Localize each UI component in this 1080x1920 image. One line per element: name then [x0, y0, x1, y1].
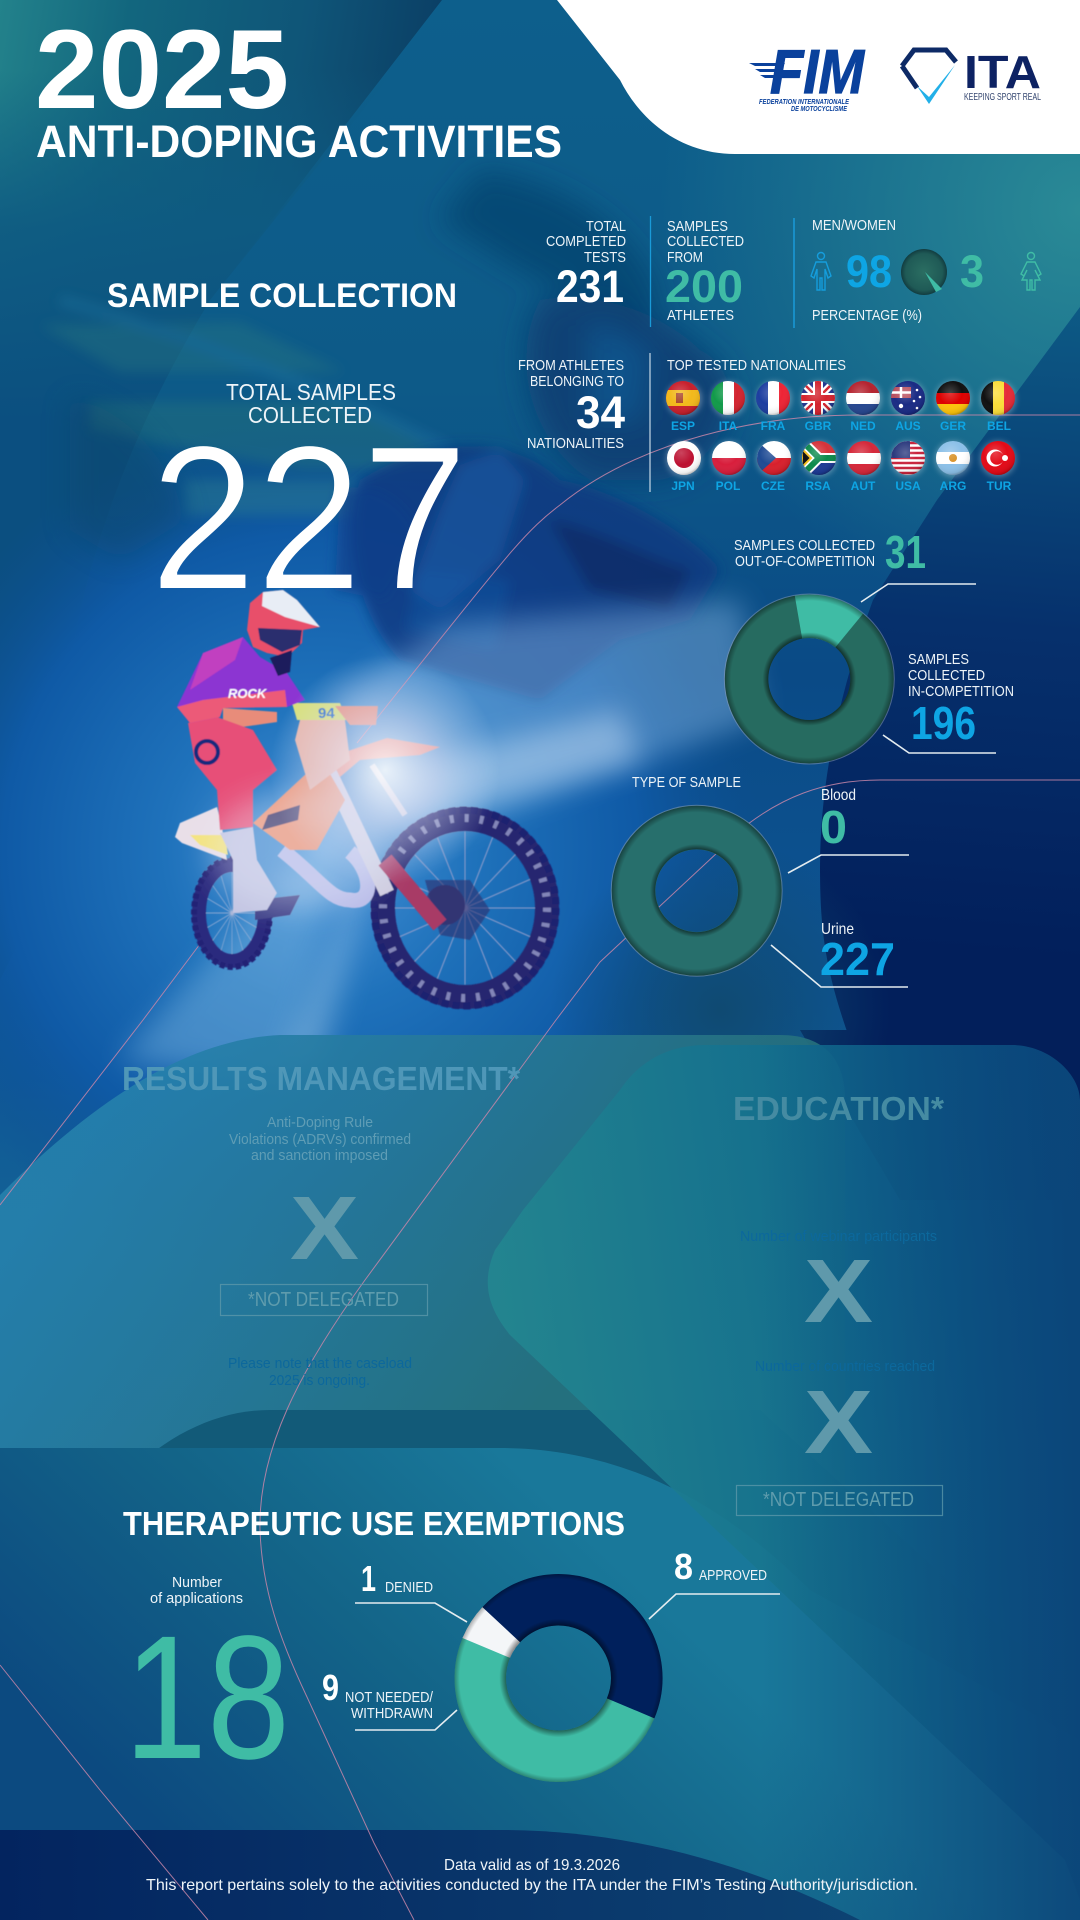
section: results management: X [290, 1179, 359, 1279]
stat: total completed tests: COMPLETED [546, 233, 626, 250]
label: denied: DENIED [385, 1579, 433, 1596]
label: denied [355, 1558, 467, 1622]
stat: samples collected from athletes: ATHLETES [667, 307, 734, 324]
flag USA [891, 441, 925, 475]
section: education: Number of webinar participants [740, 1228, 937, 1245]
flag labels: ARG [940, 479, 966, 493]
stat: number of applications: 18 [124, 1600, 290, 1796]
stat: nationalities [518, 357, 625, 452]
icon: man [811, 252, 831, 290]
stat: samples collected from athletes: FROM [667, 249, 703, 266]
label: not needed / withdrawn: NOT NEEDED/ [345, 1689, 434, 1706]
label: urine [771, 921, 908, 987]
rider boot [220, 827, 277, 913]
flag TUR [981, 441, 1015, 475]
heading: therapeutic use exemptions: THERAPEUTIC USE EXEMPTIONS [123, 1505, 625, 1542]
flag labels: RSA [805, 479, 831, 493]
section: results management: 2025 is ongoing. [269, 1372, 370, 1389]
flag FRA [756, 381, 790, 415]
stat: men / women percentage: 3 [960, 246, 984, 297]
flag NED [846, 381, 880, 415]
stat: samples collected from athletes: 200 [665, 261, 743, 312]
flag labels: TUR [987, 479, 1012, 493]
label: in-competition: IN-COMPETITION [908, 683, 1014, 700]
flag RSA [802, 441, 836, 475]
footer note: This report pertains solely to the activities conducted by the ITA under the FIM’s Testing Authority/jurisdiction. [146, 1877, 918, 1894]
header white panel [557, 0, 1080, 154]
divider [793, 218, 795, 328]
divider [649, 353, 651, 492]
stat: total completed tests: TOTAL [586, 218, 626, 235]
flag labels: ITA [719, 419, 738, 433]
stat: nationalities: BELONGING TO [530, 373, 624, 390]
section: education: *NOT DELEGATED [763, 1489, 914, 1511]
label: urine: 227 [820, 933, 895, 985]
logo: FIM: DE MOTOCYCLISME [791, 104, 848, 113]
stat: total completed tests [546, 218, 626, 312]
flag AUS [891, 381, 925, 415]
label: in-competition: 196 [911, 697, 976, 749]
section: education: X [804, 1373, 873, 1473]
flag GER [936, 381, 970, 415]
section: results management [122, 1060, 520, 1389]
footer note [146, 1857, 918, 1894]
heading: type of sample: TYPE OF SAMPLE [632, 774, 741, 791]
flag BEL [981, 381, 1015, 415]
flag labels: GER [940, 419, 966, 433]
section: education [733, 1090, 944, 1516]
flag POL [712, 441, 746, 475]
label: denied: 1 [361, 1558, 376, 1599]
frame and fork [175, 703, 440, 925]
stat: total samples collected: 227 [150, 403, 468, 633]
stat: number of applications: of applications [150, 1590, 243, 1607]
label: approved: 8 [674, 1546, 693, 1587]
flag ITA [711, 381, 745, 415]
stat: total completed tests: 231 [556, 261, 624, 312]
stat: total samples collected: COLLECTED [248, 402, 372, 428]
section: results management: Violations (ADRVs) confirmed [229, 1131, 411, 1148]
title: 2025 [35, 7, 289, 132]
pink decorative lines [0, 415, 1080, 1920]
flag GBR [801, 381, 835, 415]
rider logo on leg [196, 741, 218, 763]
footer band [0, 1830, 860, 1920]
exhaust [282, 850, 368, 900]
flag labels: AUT [851, 479, 876, 493]
label: in-competition: SAMPLES [908, 651, 969, 668]
title: ANTI-DOPING ACTIVITIES [36, 116, 562, 167]
label: approved: APPROVED [699, 1567, 767, 1584]
heading: sample collection: SAMPLE COLLECTION [107, 277, 457, 315]
rear wheel [194, 859, 270, 967]
flag JPN [667, 441, 701, 475]
flag labels: POL [716, 479, 740, 493]
flag labels: FRA [761, 419, 786, 433]
logo: ITA: ITA [964, 46, 1041, 98]
panel: results management background [0, 1035, 845, 1500]
stat: samples collected from athletes: COLLECTED [667, 233, 744, 250]
label: in-competition [883, 651, 1014, 753]
flag CZE [757, 441, 791, 475]
section: results management: *NOT DELEGATED [248, 1289, 399, 1311]
panel: therapeutic use exemptions background [0, 1410, 1080, 1920]
stat: total completed tests: TESTS [584, 249, 626, 266]
rider torso: ROCK [228, 686, 268, 701]
logo: ITA [902, 46, 1041, 104]
flag labels: NED [850, 419, 876, 433]
logo: FIM: FIM [770, 38, 865, 107]
stat: men / women percentage: MEN/WOMEN [812, 217, 896, 234]
flag halos [666, 381, 1016, 477]
flag ESP [666, 381, 700, 415]
rider legs [188, 717, 277, 830]
stat: samples collected from athletes: SAMPLES [667, 218, 728, 235]
right edge shading [760, 1045, 1080, 1920]
label: out-of-competition: OUT-OF-COMPETITION [735, 553, 875, 570]
education top-right corner [1012, 1045, 1080, 1100]
stat: samples collected from athletes [665, 218, 744, 324]
stat: men / women percentage [811, 217, 1041, 324]
label: blood: 0 [820, 801, 847, 853]
flag labels: GBR [805, 419, 832, 433]
pie: men/women [901, 249, 947, 295]
rider torso [177, 637, 305, 723]
section: results management: RESULTS MANAGEMENT* [122, 1060, 520, 1097]
logo: FIM: FEDERATION INTERNATIONALE [759, 97, 850, 106]
logo: ITA: KEEPING SPORT REAL [964, 92, 1041, 103]
donut chart: type of sample [611, 805, 782, 976]
label: not needed / withdrawn: WITHDRAWN [351, 1705, 433, 1722]
label: urine: Urine [821, 921, 854, 938]
flag grid [666, 381, 1016, 493]
label: in-competition: COLLECTED [908, 667, 985, 684]
label: out-of-competition: SAMPLES COLLECTED [734, 537, 875, 554]
section: results management: and sanction imposed [251, 1147, 388, 1164]
rider on motorbike [175, 590, 556, 1006]
section: education: EDUCATION* [733, 1090, 944, 1127]
section: results management: Please note that the caseload [228, 1355, 412, 1372]
label: approved [649, 1546, 780, 1619]
donut chart: in vs out of competition [724, 594, 894, 764]
heading: top tested nationalities: TOP TESTED NATIONALITIES [667, 357, 846, 374]
label: not needed / withdrawn [322, 1667, 457, 1730]
stat: nationalities: NATIONALITIES [527, 435, 624, 452]
flag labels: CZE [761, 479, 785, 493]
flag labels: AUS [895, 419, 921, 433]
stat: nationalities: 34 [576, 387, 625, 438]
icon: woman [1021, 252, 1041, 290]
stat: number of applications: Number [172, 1574, 222, 1591]
light beams [120, 600, 760, 1080]
stat: nationalities: FROM ATHLETES [518, 357, 624, 374]
footer note: Data valid as of 19.3.2026 [444, 1857, 620, 1874]
light flare over bike [270, 655, 500, 885]
label: not needed / withdrawn: 9 [322, 1667, 339, 1708]
stat: total samples collected: TOTAL SAMPLES [226, 379, 396, 405]
flag gloss [666, 381, 1015, 475]
label: blood [788, 787, 909, 873]
section: education: Number of countries reached [755, 1358, 935, 1375]
title [35, 7, 562, 167]
flag labels: JPN [671, 479, 695, 493]
rider helmet [247, 590, 320, 676]
front wheel [374, 810, 556, 1006]
logo: FIM [749, 38, 865, 113]
panel: education background [488, 1045, 1080, 1900]
flag labels: BEL [987, 419, 1011, 433]
divider [650, 216, 652, 327]
label: blood: Blood [821, 787, 856, 804]
label: out-of-competition: 31 [885, 526, 926, 578]
stat: men / women percentage: 98 [846, 246, 892, 297]
flag labels: ESP [671, 419, 695, 433]
background photo: blurred racer and track [40, 170, 730, 700]
flag AUT [847, 441, 881, 475]
section: education: X [804, 1242, 873, 1342]
stat: men / women percentage: PERCENTAGE (%) [812, 307, 922, 324]
flag labels: USA [895, 479, 921, 493]
frame and fork: 94 [318, 705, 335, 722]
flag labels [671, 419, 1012, 493]
section: results management: Anti-Doping Rule [267, 1114, 373, 1131]
label: out-of-competition [734, 526, 976, 602]
flag ARG [936, 441, 970, 475]
donut chart: TUE outcomes [448, 1567, 669, 1789]
